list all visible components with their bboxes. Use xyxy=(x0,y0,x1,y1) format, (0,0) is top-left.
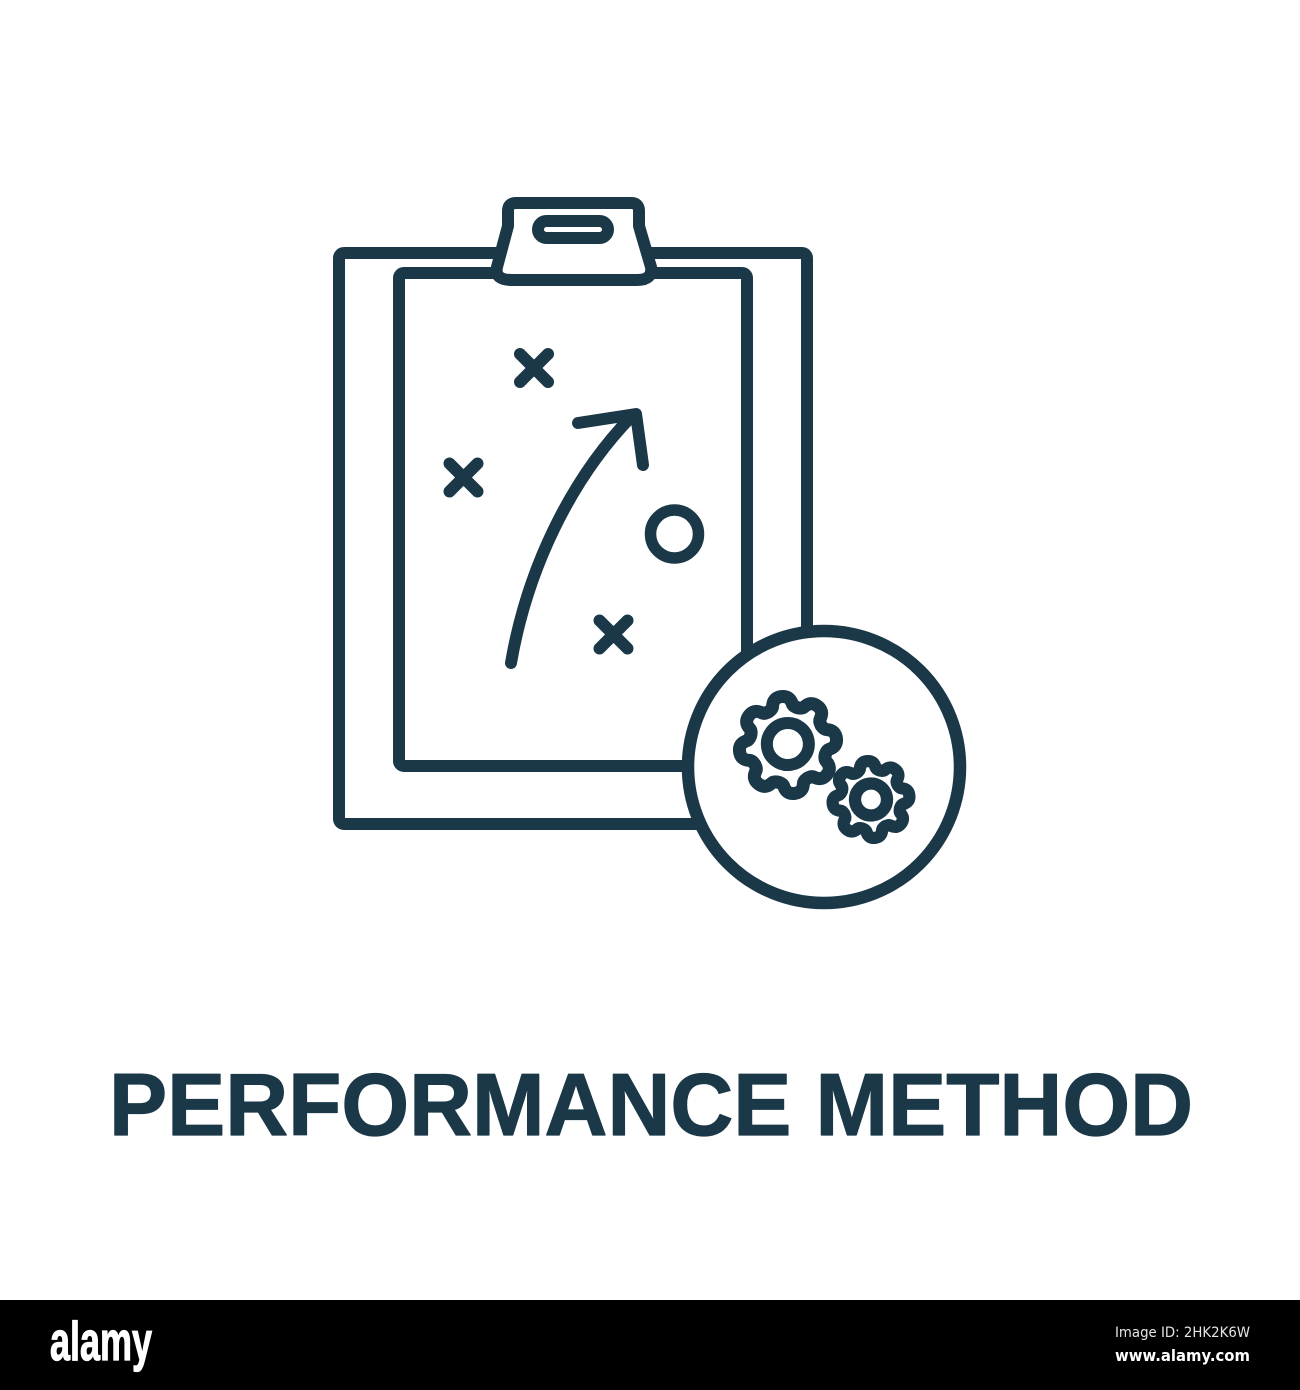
clipboard board outline xyxy=(339,253,807,824)
gear badge circle xyxy=(688,631,960,903)
play mark: left cross xyxy=(450,464,478,492)
title: PERFORMANCE METHOD xyxy=(109,1055,1193,1154)
image id: Image ID: 2HK2K6W xyxy=(1115,1325,1250,1341)
curved strategy arrow xyxy=(511,414,643,663)
website: www.alamy.com xyxy=(1115,1346,1250,1365)
play mark: circle xyxy=(650,510,698,558)
play mark: top cross xyxy=(520,354,548,382)
large gear xyxy=(733,690,843,800)
play mark: lower cross xyxy=(600,620,628,648)
clipboard paper sheet xyxy=(399,273,747,766)
clip slot xyxy=(538,221,608,238)
footer bar xyxy=(0,1300,1300,1390)
small gear xyxy=(829,757,913,842)
clipboard clip xyxy=(497,203,651,280)
footer logo: alamy xyxy=(50,1310,152,1372)
icon: performance method clipboard xyxy=(339,203,960,903)
